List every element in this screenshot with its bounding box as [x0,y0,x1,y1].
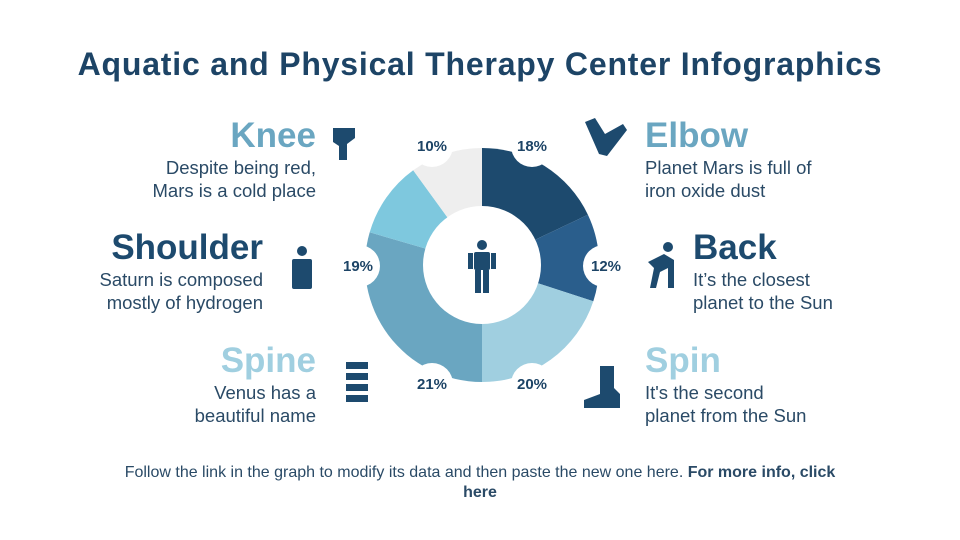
donut chart: 21% [417,376,447,393]
block: spine: Spine [221,341,316,380]
title: Aquatic and Physical Therapy Center Infographics [78,46,882,82]
donut chart: 10% [417,138,447,155]
block: spin: planet from the Sun [645,405,806,426]
block: back: planet to the Sun [693,292,833,313]
block: shoulder: Saturn is composed [99,269,263,290]
block: shoulder [99,228,263,313]
block: spin: Spin [645,341,721,380]
block: spine: Venus has a [214,382,316,403]
icon: elbow [585,118,627,156]
donut chart: 12% [591,258,621,275]
icon: back [648,242,674,288]
block: spin: It's the second [645,382,764,403]
icon: center person [468,240,496,293]
block: elbow: iron oxide dust [645,180,765,201]
donut chart: 18% [517,138,547,155]
block: back: Back [693,228,777,267]
block: spine: beautiful name [195,405,316,426]
block: elbow: Planet Mars is full of [645,157,812,178]
block: knee: Despite being red, [166,157,316,178]
block: knee: Mars is a cold place [153,180,316,201]
footer: Follow the link in the graph to modify its data and then paste the new one here. For more info, click here [125,464,835,501]
donut chart: 20% [517,376,547,393]
block: spin [645,341,806,426]
block: spine [195,341,316,426]
block: shoulder: mostly of hydrogen [107,292,263,313]
block: knee [153,116,316,201]
icon: spine [346,362,368,402]
block: back: It’s the closest [693,269,810,290]
icon: knee [333,128,355,160]
icon: foot [584,366,620,408]
block: back [693,228,833,313]
block: knee: Knee [230,116,316,155]
block: elbow [645,116,812,201]
donut chart: 19% [343,258,373,275]
icon: shoulder [292,246,312,289]
block: elbow: Elbow [645,116,748,155]
block: shoulder: Shoulder [111,228,263,267]
